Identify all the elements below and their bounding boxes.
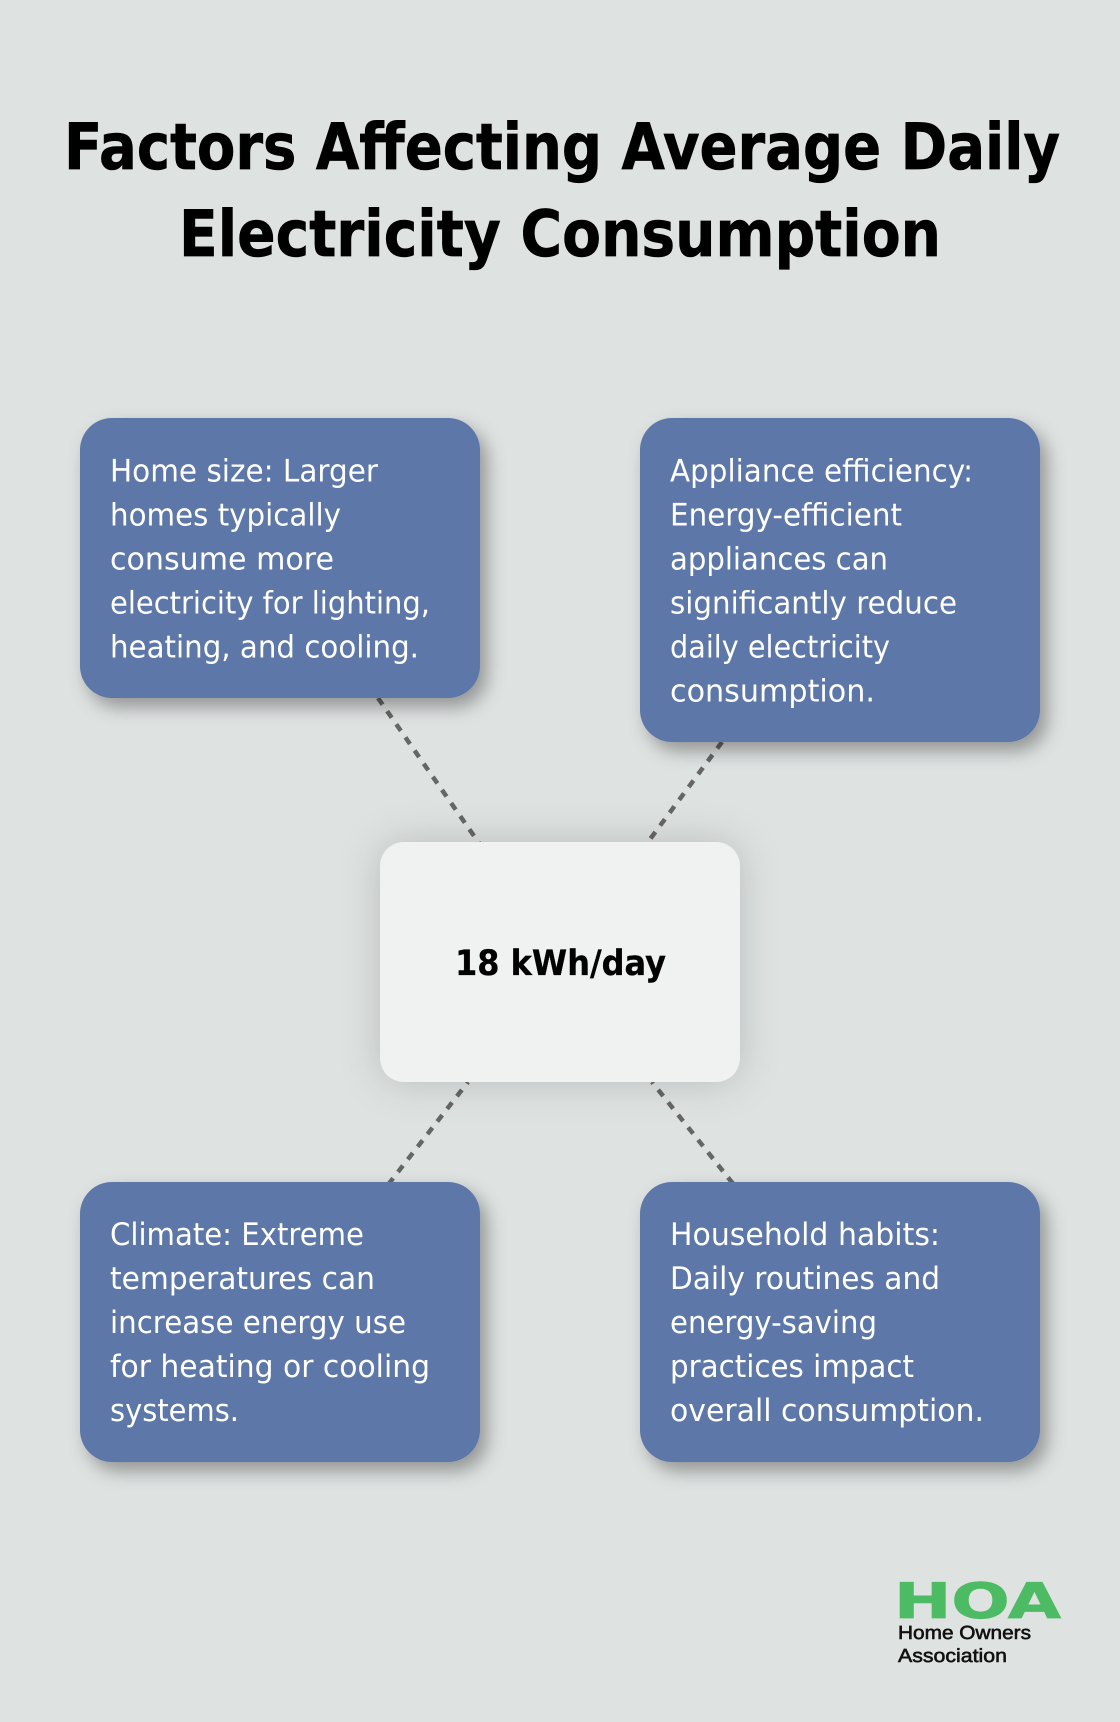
panel: household habits: practices impact (670, 1349, 914, 1385)
panel: household habits: Daily routines and (670, 1261, 940, 1297)
logo: HOA Home Owners Association: HOA (894, 1573, 1061, 1630)
panel: appliance efficiency: appliances can (670, 542, 888, 578)
panel: household habits: Household habits: (670, 1217, 940, 1253)
connector: appliance efficiency to center (645, 742, 722, 846)
panel: household habits: overall consumption. (670, 1393, 984, 1429)
panel: home size: heating, and cooling. (110, 630, 419, 666)
panel: climate: increase energy use (110, 1305, 406, 1341)
panel: home size: electricity for lighting, (110, 586, 430, 622)
connector: climate to center (384, 1082, 468, 1190)
panel: climate: Climate: Extreme (110, 1217, 364, 1253)
logo: HOA Home Owners Association: Home Owners (898, 1623, 1031, 1644)
panel: appliance efficiency: daily electricity (670, 630, 890, 666)
panel: appliance efficiency: significantly reduce (670, 586, 957, 622)
connector: household habits to center (652, 1082, 738, 1190)
panel: center value: 18 kWh/day (455, 944, 666, 984)
panel: appliance efficiency (640, 418, 1040, 742)
logo: HOA Home Owners Association: Association (898, 1646, 1007, 1667)
title: Electricity Consumption (179, 198, 941, 272)
panel: center value (380, 842, 740, 1082)
connector: home size to center (378, 698, 481, 846)
panel: appliance efficiency: consumption. (670, 674, 875, 710)
panel: home size: Home size: Larger (110, 454, 378, 490)
panel: household habits (640, 1182, 1040, 1462)
panel: home size (80, 418, 480, 698)
panel: household habits: energy-saving (670, 1305, 877, 1341)
title (64, 111, 1060, 272)
panel: climate: for heating or cooling (110, 1349, 430, 1385)
panel: appliance efficiency: Appliance efficiency: (670, 454, 973, 490)
panel: climate (80, 1182, 480, 1462)
panel: climate: systems. (110, 1393, 239, 1429)
panel: climate: temperatures can (110, 1261, 375, 1297)
logo: HOA Home Owners Association (894, 1573, 1061, 1667)
panel: home size: consume more (110, 542, 334, 578)
panel: appliance efficiency: Energy-efficient (670, 498, 902, 534)
panel: home size: homes typically (110, 498, 341, 534)
